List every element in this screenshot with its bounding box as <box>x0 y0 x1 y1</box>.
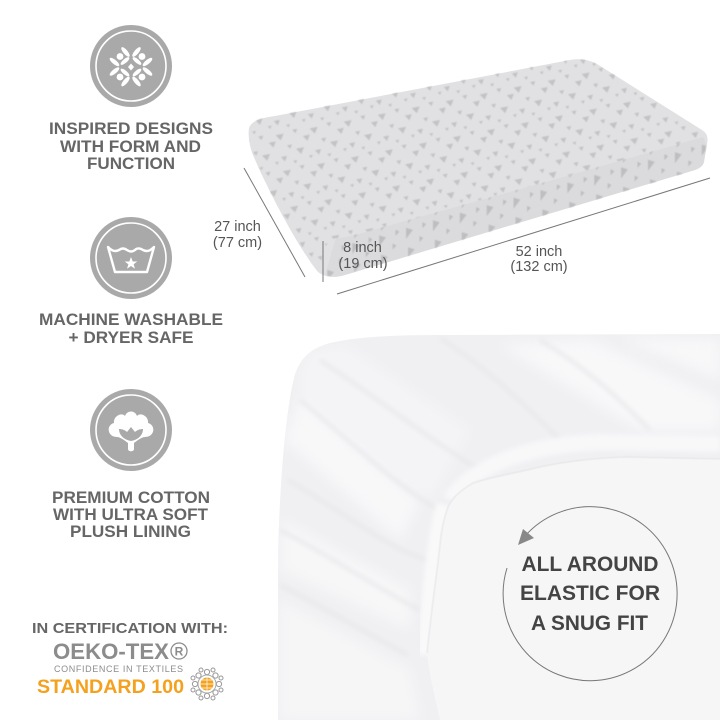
callout text: A SNUG FIT <box>531 612 648 635</box>
dimension: length 52 inch: 52 inch <box>516 244 562 260</box>
callout: elastic arc arrow <box>503 507 677 681</box>
registered mark: R <box>175 644 184 658</box>
heading: premium cotton: WITH ULTRA SOFT <box>53 505 209 524</box>
heading: machine washable: MACHINE WASHABLE <box>39 310 223 329</box>
dimension: width 27 inch: 27 inch <box>214 219 261 235</box>
icon: cotton boll <box>90 389 172 471</box>
heading: premium cotton <box>52 488 210 541</box>
dimension: width 27 inch: (77 cm) <box>213 235 262 251</box>
icon: floral pattern <box>90 25 172 107</box>
panel: mattress illustration <box>249 59 707 277</box>
certification heading: IN CERTIFICATION WITH: <box>32 620 228 637</box>
heading: inspired designs: FUNCTION <box>87 154 175 173</box>
tagline: CONFIDENCE IN TEXTILES <box>54 664 183 674</box>
callout text <box>520 553 660 635</box>
heading: premium cotton: PREMIUM COTTON <box>52 488 210 507</box>
mattress body <box>249 59 707 277</box>
sheet flat underside <box>427 457 720 720</box>
heading: machine washable <box>39 310 223 347</box>
dimension: depth 8 inch: 8 inch <box>343 240 382 256</box>
heading: inspired designs: WITH FORM AND <box>60 137 201 156</box>
dimension: width 27 inch <box>213 168 305 277</box>
callout text: ELASTIC FOR <box>520 582 660 605</box>
icon: wash basin <box>90 217 172 299</box>
heading: premium cotton: PLUSH LINING <box>70 522 191 541</box>
registered mark <box>171 643 187 659</box>
heading: machine washable: + DRYER SAFE <box>68 328 194 347</box>
callout text: ALL AROUND <box>522 553 658 576</box>
sheet fabric <box>278 334 720 720</box>
heading: inspired designs: INSPIRED DESIGNS <box>49 119 213 138</box>
dimension: depth 8 inch: (19 cm) <box>338 256 388 272</box>
icon: oeko-tex flower <box>191 668 223 700</box>
mattress top pattern <box>249 59 706 268</box>
elastic seam <box>427 457 720 653</box>
panel: certification <box>32 620 228 700</box>
mattress side pattern <box>325 137 706 276</box>
dimension: depth 8 inch <box>323 240 388 282</box>
panel: sheet corner photo <box>278 334 720 720</box>
dimension: length 52 inch <box>337 178 710 294</box>
OEKO-TEX wordmark: OEKO-TEX <box>53 639 169 664</box>
standard 100: STANDARD 100 <box>37 677 184 698</box>
dimension: length 52 inch: (132 cm) <box>510 259 568 275</box>
heading: inspired designs <box>49 119 213 173</box>
